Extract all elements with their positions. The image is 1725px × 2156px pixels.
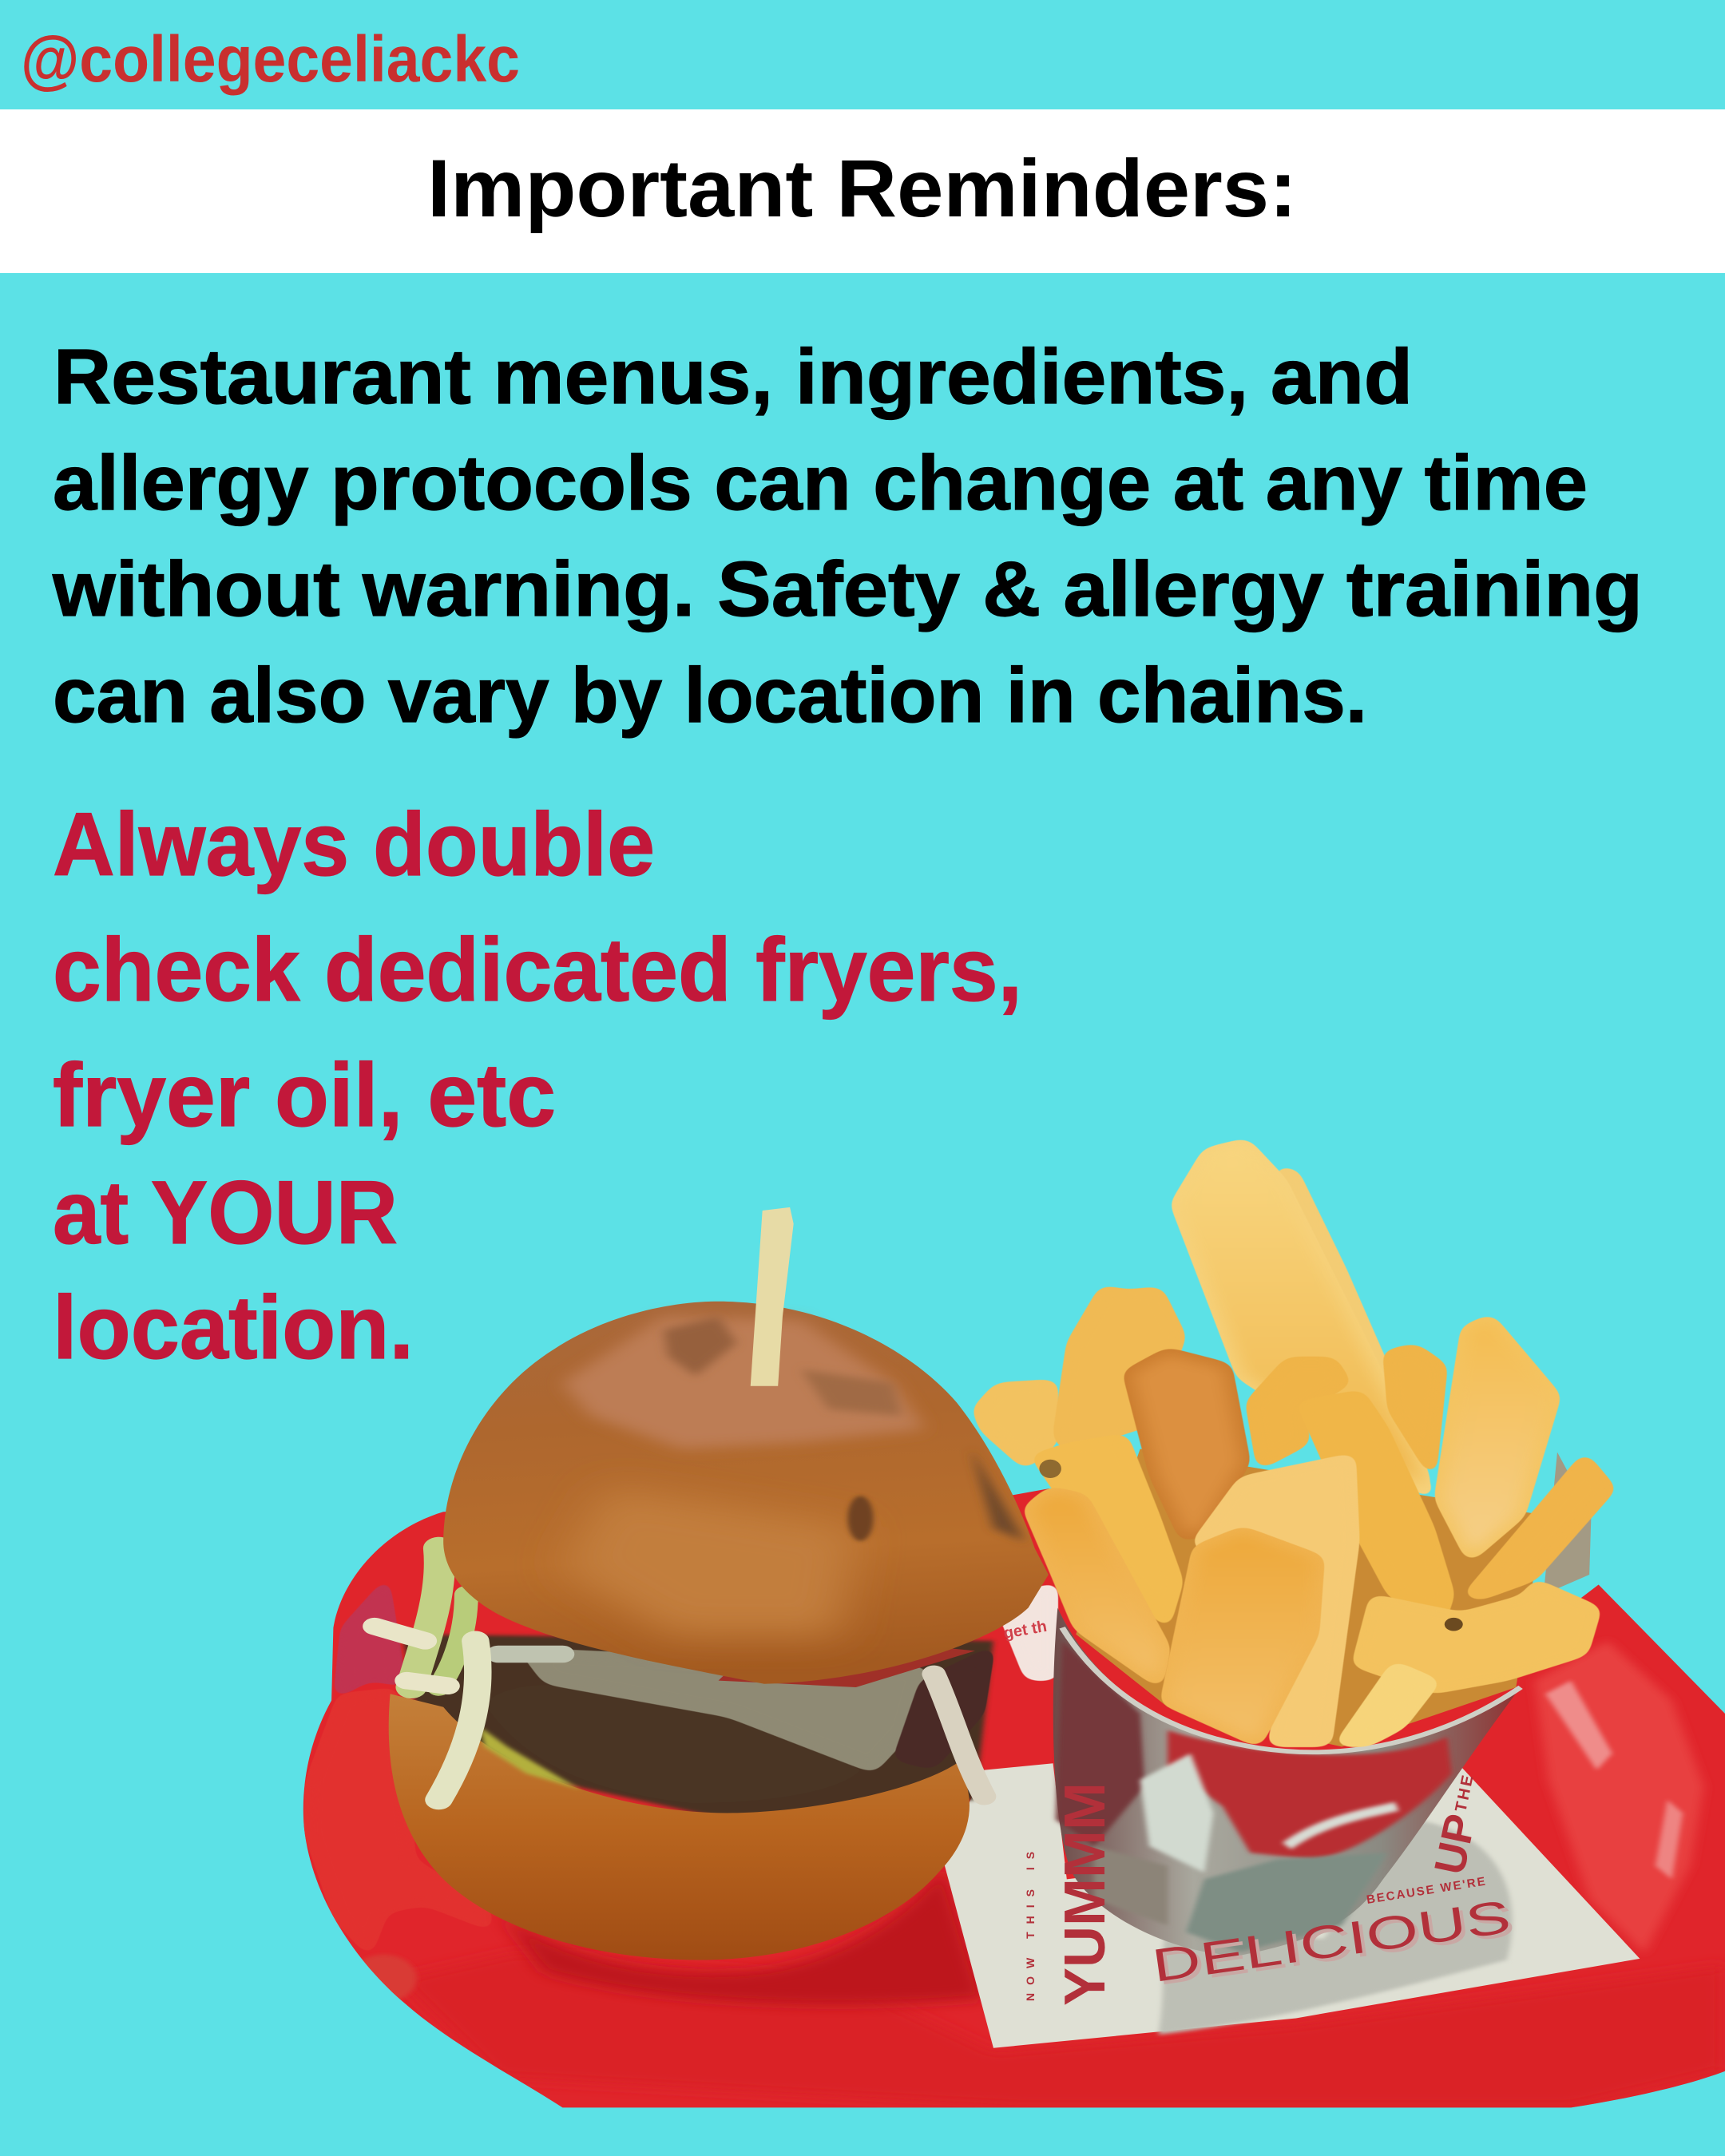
napkin printed text: THE: [1452, 1772, 1477, 1813]
title band: [0, 109, 1725, 273]
fries: [977, 1142, 1612, 1747]
napkin printed text: UP: [1426, 1810, 1485, 1878]
social handle: @collegeceliackc: [21, 23, 520, 96]
napkin printed text: DELICIOUS: [1153, 1894, 1517, 1995]
burger filling backing: [402, 1635, 993, 1820]
reminder paragraph: [52, 333, 1643, 739]
napkin printed text: BECAUSE WE'RE: [1366, 1874, 1488, 1907]
red warning text: [53, 795, 1022, 1377]
napkin printed text: [1002, 1618, 1517, 2006]
napkin: [943, 1763, 1640, 2048]
burger: [375, 1207, 1049, 1960]
lettuce: [375, 1548, 984, 1800]
reminder paragraph: allergy protocols can change at any time: [53, 439, 1588, 526]
red warning text: Always double: [53, 795, 655, 894]
red warning text: check dedicated fryers,: [53, 920, 1022, 1020]
reminder paragraph: Restaurant menus, ingredients, and: [54, 333, 1413, 420]
food photo illustration: burger and fries on red tray: [303, 1142, 1725, 2107]
napkin printed text: YUMMM: [1053, 1782, 1117, 2006]
top bun: [443, 1302, 1049, 1684]
napkin printed text: NOW THIS IS: [1024, 1844, 1037, 2001]
red warning text: at YOUR: [53, 1163, 398, 1262]
reminder paragraph: can also vary by location in chains.: [53, 652, 1367, 739]
red warning text: fryer oil, etc: [53, 1045, 556, 1145]
napkin printed text: DELICIOUS: [1149, 1891, 1513, 1992]
patty and cheese: [485, 1685, 861, 1803]
reminder paragraph: without warning. Safety & allergy training: [52, 545, 1643, 632]
red tray: [303, 1488, 1725, 2107]
red warning text: location.: [53, 1278, 414, 1377]
title: Important Reminders:: [427, 143, 1297, 234]
toothpick: [751, 1207, 794, 1386]
french fries bucket: [1053, 1453, 1591, 1956]
bottom bun: [389, 1694, 970, 1960]
napkin printed text: get th: [1002, 1618, 1048, 1643]
